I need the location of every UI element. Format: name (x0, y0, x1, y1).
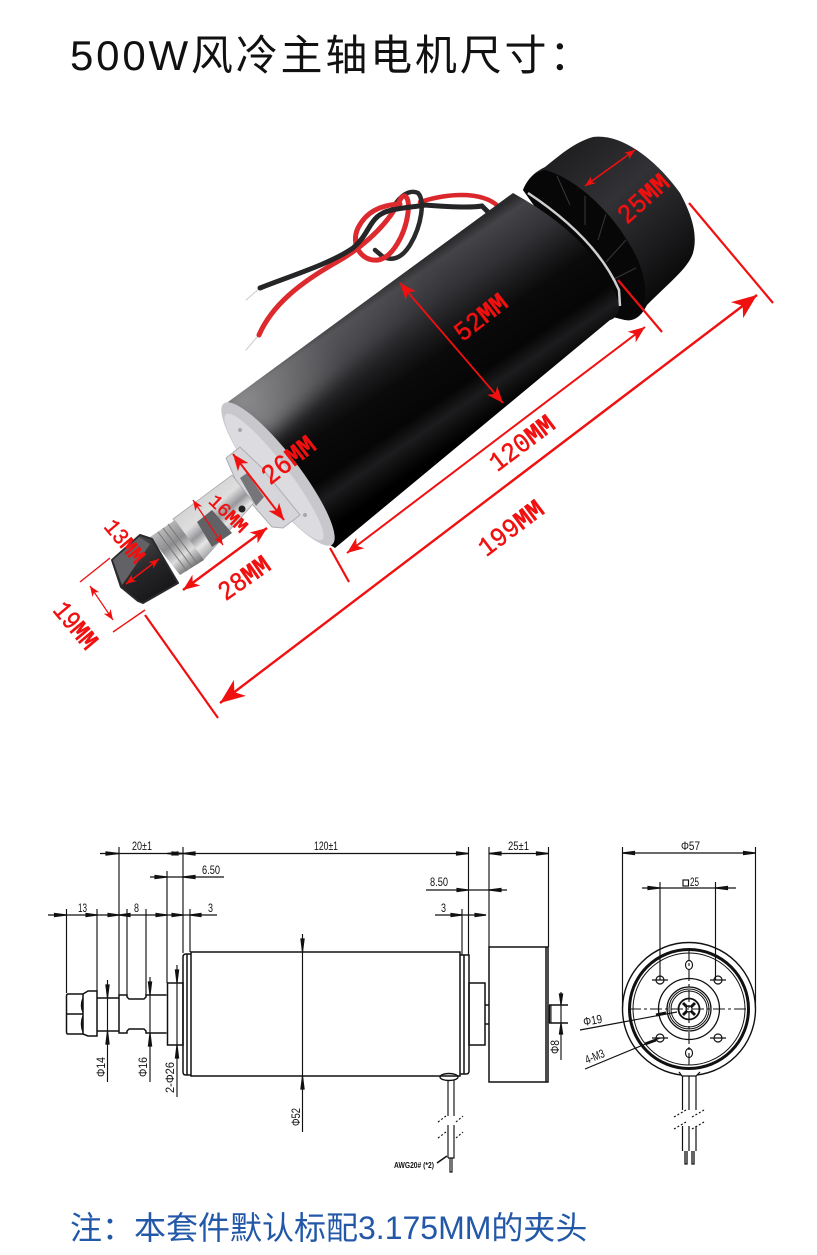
label: 120MM: 120MM (483, 409, 562, 479)
side-view technical drawing (48, 839, 568, 1172)
dimension: 6.50: 6.50 (202, 863, 220, 877)
dimension: 8.50 and 3 at rear: 3 (441, 901, 446, 915)
diameter callouts (94, 934, 563, 1132)
dimension: 8.50 and 3 at rear: 8.50 (430, 875, 448, 889)
label: 28MM: 28MM (213, 550, 277, 608)
label: 52MM: 52MM (448, 288, 515, 349)
title: 500W风冷主轴电机尺寸： (70, 32, 594, 79)
arrow: 25MM (585, 150, 635, 186)
leader: 4-M3: 4-M3 (583, 1046, 607, 1067)
diameter callouts: Φ8 (548, 1040, 562, 1054)
motor outline (66, 947, 568, 1082)
diameter callouts: Φ52 (289, 1108, 303, 1126)
label: 199MM: 199MM (472, 494, 551, 564)
leader: 4-M3 (583, 1038, 660, 1069)
rear-view technical drawing (580, 839, 756, 1164)
arrow: 13MM (126, 559, 159, 584)
dimension: 20±1 and 120±1: 20±1 (132, 839, 152, 853)
photo: air-cooled spindle motor with red dimensions (45, 137, 773, 718)
arrow: 28MM (183, 528, 267, 590)
rear-view wires (674, 1072, 704, 1164)
dimension row: 13, 8, 3 (48, 901, 217, 996)
label: 16MM: 16MM (203, 491, 252, 538)
red dimension labels (45, 168, 677, 657)
dimension: Φ57: Φ57 (681, 839, 700, 853)
dimension: 6.50 (150, 863, 224, 879)
arrow: 52MM (400, 283, 503, 403)
dimension row: 13, 8, 3: 13 (78, 901, 87, 915)
wire with break marks and AWG label (394, 1074, 463, 1172)
mounting hub and collet (112, 447, 300, 603)
diameter callouts: Φ16 (136, 1057, 150, 1077)
label: 13MM: 13MM (97, 515, 149, 570)
label: 19MM: 19MM (45, 597, 103, 657)
leader: Φ19 (580, 1012, 677, 1030)
arrow: 199MM (220, 295, 757, 703)
motor body (215, 193, 620, 548)
dimension: 20±1 and 120±1 (100, 839, 468, 995)
arrow: 19MM (90, 586, 113, 620)
label: 25MM: 25MM (612, 168, 677, 231)
leader: Φ19: Φ19 (582, 1012, 603, 1029)
dimension: 25±1: 25±1 (508, 839, 529, 853)
label: 26MM: 26MM (256, 430, 323, 492)
wires (246, 192, 498, 350)
dimension: Φ57 (622, 839, 756, 1008)
dimension: square 25 (642, 875, 736, 980)
fan cap (523, 137, 695, 320)
dimension row: 13, 8, 3: 8 (134, 901, 139, 915)
diameter callouts: 2-Φ26 (163, 1062, 177, 1093)
diameter callouts: Φ14 (94, 1057, 108, 1077)
dimension: 8.50 and 3 at rear (426, 875, 507, 955)
dimension: 25±1 (489, 839, 548, 947)
wire with break marks and AWG label: AWG20# (*2) (394, 1161, 434, 1170)
motor front face (207, 391, 349, 557)
dimension row: 13, 8, 3: 3 (208, 901, 213, 915)
arrow: 16MM (193, 500, 223, 545)
dimension: square 25: 25 (690, 875, 699, 889)
dimension: 20±1 and 120±1: 120±1 (314, 839, 338, 853)
fan circles and hole pattern (622, 942, 756, 1076)
footer note: 注：本套件默认标配3.175MM的夹头 (70, 1210, 587, 1246)
red dimension lines and extension lines (80, 150, 773, 718)
arrow: 120MM (347, 327, 645, 553)
arrow: 26MM (233, 454, 284, 520)
